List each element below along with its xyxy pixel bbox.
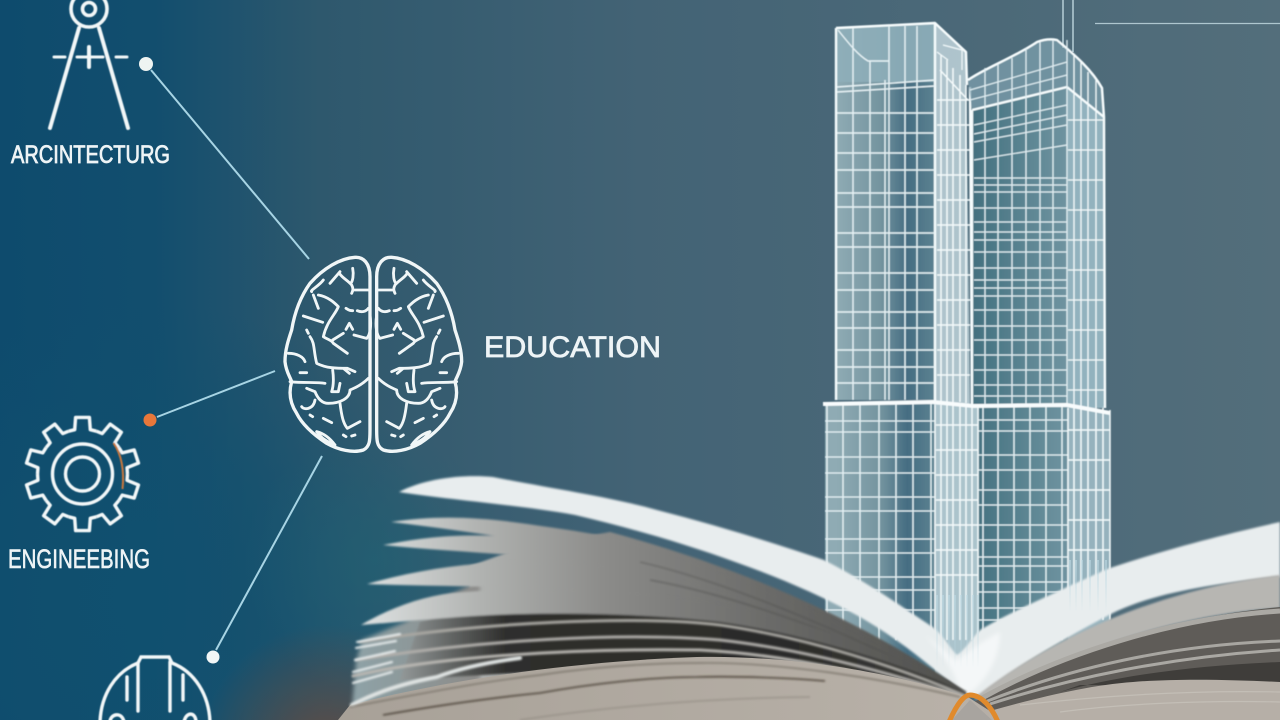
connector lines xyxy=(151,70,322,650)
node: construction dot xyxy=(206,650,220,664)
blueprint marker lines, top right xyxy=(1063,0,1280,52)
book: stacked left pages xyxy=(361,518,966,702)
book: white top leaves xyxy=(399,476,1280,696)
book: base page block, left xyxy=(338,657,968,720)
label: architecture: ARCINTECTURG xyxy=(11,141,170,169)
brain: right hemisphere xyxy=(376,257,462,451)
node: engineering dot xyxy=(144,414,156,426)
tower: right tower xyxy=(968,39,1105,408)
tower fading into the left pages xyxy=(937,595,978,668)
bookmark: orange cord xyxy=(949,695,998,720)
book: page tip zone, left xyxy=(352,580,480,707)
tower: left tower xyxy=(836,23,972,405)
tower: lower block xyxy=(825,404,1110,680)
open book xyxy=(338,476,1280,720)
node: architecture dot xyxy=(139,57,153,71)
icon: hard hat xyxy=(100,657,210,720)
book: faint edge lines, right xyxy=(1020,692,1280,712)
book: centre wedge xyxy=(952,700,992,720)
book: base page block, right xyxy=(968,680,1280,720)
brain: left hemisphere xyxy=(285,257,371,451)
book: dark edge lines, left xyxy=(350,663,960,720)
book: stacked right pages xyxy=(974,575,1280,716)
book: page edge stripes, left xyxy=(353,620,966,700)
icon: brain xyxy=(285,257,462,451)
icon: drafting compass xyxy=(50,0,128,128)
label: education: EDUCATION xyxy=(484,331,661,364)
label: engineering: ENGINEEBING xyxy=(8,544,150,574)
book: edge highlight, left xyxy=(352,658,520,705)
book: white glow at the spine xyxy=(925,632,1000,692)
book: page backing, left xyxy=(470,532,966,706)
tower: ledge xyxy=(823,402,1110,413)
wireframe towers xyxy=(823,23,1110,680)
tower fading into the right pages xyxy=(1070,560,1106,612)
icon: gear xyxy=(24,417,141,531)
